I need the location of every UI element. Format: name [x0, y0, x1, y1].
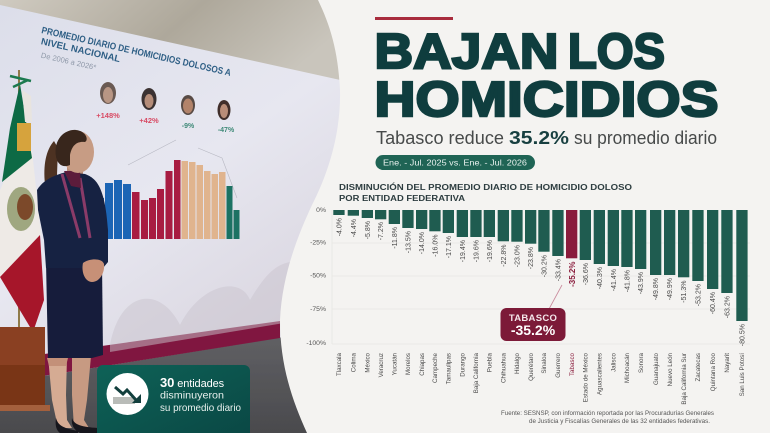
flag of Mexico [0, 70, 44, 332]
value labels: -5.8% [365, 221, 372, 239]
state labels: Estado de México [583, 352, 590, 402]
state labels: Quintana Roo [710, 352, 717, 391]
state labels [336, 352, 746, 405]
state labels: Veracruz [378, 353, 385, 377]
value labels: -23.8% [528, 247, 535, 269]
state labels: San Luis Potosí [739, 353, 746, 396]
y axis labels: -100% [306, 340, 326, 347]
title [374, 25, 718, 127]
state labels: Guanajuato [653, 352, 660, 385]
title: LOS [568, 25, 665, 79]
value labels: -14.0% [419, 232, 426, 254]
y axis labels [306, 207, 326, 347]
screen portraits and percentages: -9% [182, 123, 195, 130]
value labels: -49.9% [667, 278, 674, 300]
source note [501, 410, 714, 425]
screen heading: NIVEL NACIONAL [40, 36, 121, 65]
value labels: -30.2% [542, 255, 548, 277]
subtitle: su promedio diario [574, 127, 717, 148]
y axis labels: -75% [310, 306, 326, 313]
callout: Tabasco [500, 285, 566, 341]
state labels: Michoacán [624, 352, 631, 383]
state labels: Nayarit [724, 353, 731, 373]
woman standing [37, 130, 108, 433]
title: HOMICIDIOS [374, 73, 718, 127]
callout: Tabasco: TABASCO [509, 313, 557, 324]
chart heading: POR ENTIDAD FEDERATIVA [339, 194, 465, 203]
screen portraits and percentages: +42% [139, 116, 159, 125]
bars [333, 210, 748, 321]
ceiling [0, 0, 340, 80]
value labels: -43.9% [638, 272, 645, 294]
value labels: -7.2% [378, 222, 385, 240]
value labels: -53.2% [696, 284, 702, 306]
icon: falling trend arrow [106, 373, 148, 415]
state labels: Chiapas [419, 353, 426, 376]
state labels: Jalisco [611, 352, 618, 372]
wall band [30, 321, 280, 378]
floor [0, 338, 307, 433]
state labels: Campeche [432, 352, 439, 383]
screen heading: De 2006 a 2026* [40, 51, 97, 72]
date pill [376, 155, 535, 170]
y axis labels: -25% [310, 240, 326, 246]
chart heading: DISMINUCIÓN DEL PROMEDIO DIARIO DE HOMICIDIO DOLOSO [339, 183, 632, 192]
state labels: Sonora [638, 352, 645, 373]
value labels: -49.8% [653, 278, 660, 300]
value labels: -19.6% [487, 240, 494, 262]
state labels: México [365, 352, 372, 373]
screen heading: PROMEDIO DIARIO DE HOMICIDIOS DOLOSOS A [40, 25, 232, 79]
state labels: Tamaulipas [446, 353, 453, 384]
state labels: Guerrero [555, 352, 562, 378]
value labels: -4.4% [351, 219, 358, 237]
state labels: Puebla [487, 352, 494, 372]
state labels: Zacatecas [695, 353, 702, 382]
state labels: Querétaro [528, 352, 535, 381]
accent rule [375, 17, 453, 20]
value labels: -4.0% [336, 218, 344, 236]
state labels: Aguascalientes [597, 353, 604, 395]
value labels: -41.4% [611, 269, 618, 291]
screen bar chart [98, 140, 240, 239]
screen portraits and percentages: +148% [96, 111, 120, 120]
card: 30 entidades [97, 365, 250, 433]
value labels [336, 218, 746, 346]
photo: press conference scene [0, 0, 345, 433]
value labels: -36.6% [583, 263, 590, 285]
card text: 30 entidades [160, 375, 225, 390]
value labels: -11.8% [392, 227, 399, 249]
value labels: -63.2% [724, 296, 732, 318]
state labels: Nuevo León [667, 352, 674, 386]
state labels: Yucatán [392, 352, 399, 375]
subtitle: 35.2% [509, 127, 569, 148]
projection screen [0, 5, 340, 354]
value labels: -80.5% [740, 324, 746, 346]
state labels: Chihuahua [501, 352, 508, 383]
value labels: -19.4% [460, 240, 467, 262]
value labels: -17.1% [446, 236, 453, 258]
state labels: Baja California Sur [681, 353, 688, 405]
state labels: Tlaxcala [336, 352, 343, 376]
card: 30 entidades: disminuyeron [160, 390, 224, 402]
callout: Tabasco: -35.2% [511, 322, 556, 338]
wall shadow pattern [110, 262, 290, 352]
state labels: Baja California [473, 352, 480, 393]
source note: Fuente: SESNSP, con información reportada por las Procuradurías Generales [501, 410, 714, 417]
state labels: Colima [351, 352, 358, 372]
state labels: Sinaloa [541, 352, 548, 374]
subtitle [376, 127, 717, 148]
state labels: Durango [460, 352, 467, 377]
value labels: -19.6% [474, 240, 480, 262]
value labels: -41.8% [624, 270, 632, 292]
value labels: -13.5% [406, 231, 412, 253]
y axis labels: -50% [310, 272, 326, 280]
state labels: Hidalgo [514, 352, 521, 374]
podium [0, 327, 50, 411]
state labels: Morelos [405, 353, 412, 375]
date pill: Ene. - Jul. 2025 vs. Ene. - Jul. 2026 [383, 158, 527, 168]
value labels: -35.2% [568, 262, 577, 287]
value labels: -22.8% [501, 244, 508, 267]
value labels: -60.4% [710, 292, 717, 314]
value labels: -23.0% [514, 245, 522, 267]
screen portraits and percentages: -47% [218, 127, 235, 134]
title: BAJAN [374, 25, 558, 79]
source note: de Justicia y Fiscalías Generales de las 32 entidades federativas. [529, 418, 710, 425]
value labels: -33.4% [556, 259, 562, 281]
subtitle: Tabasco reduce [376, 127, 504, 148]
value labels: -40.3% [597, 267, 604, 289]
state labels: Tabasco [569, 352, 576, 376]
chart heading [339, 183, 632, 203]
value labels: -51.3% [681, 280, 688, 303]
value labels: -16.0% [432, 234, 440, 257]
y axis labels: 0% [316, 207, 326, 214]
bar chart: decrease by state [306, 207, 750, 405]
card: 30 entidades: su promedio diario [160, 402, 241, 414]
screen portraits and percentages [96, 82, 235, 134]
